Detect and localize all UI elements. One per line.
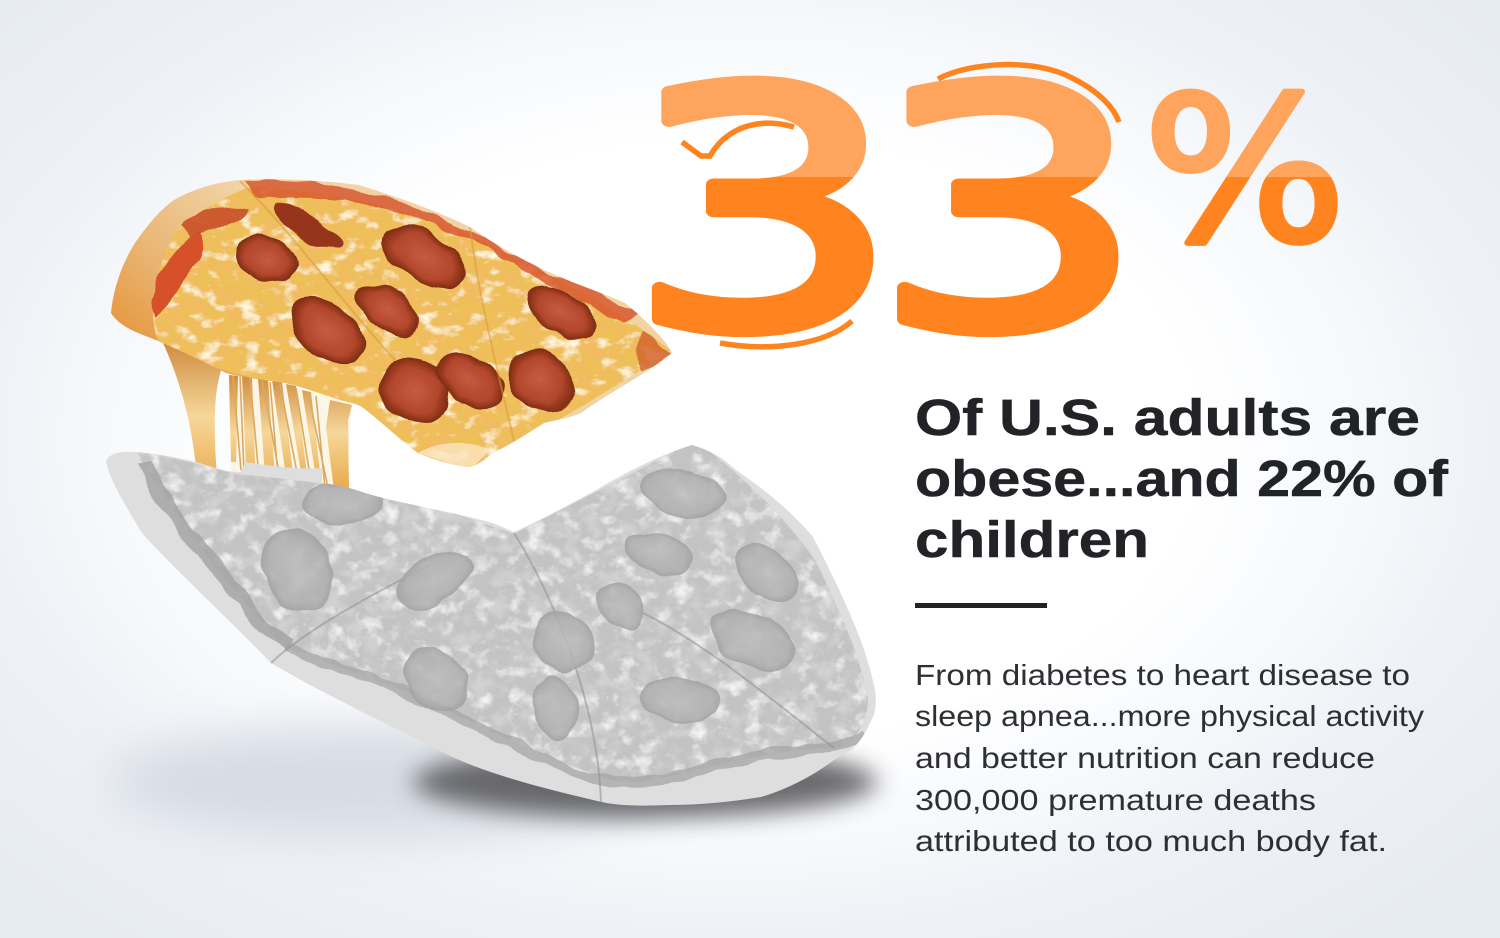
body text: [915, 660, 1425, 858]
body text: 300,000 premature deaths: [915, 785, 1316, 817]
heading: obese...and 22% of: [915, 450, 1449, 507]
slice cuts: [240, 181, 515, 445]
grey sauce and cheese surface: [138, 440, 868, 782]
body text: From diabetes to heart disease to: [915, 660, 1410, 692]
grey pepperoni: [249, 461, 810, 743]
pepperoni: [236, 202, 597, 423]
body text: sleep apnea...more physical activity: [915, 701, 1425, 733]
cheese surface: [153, 187, 670, 472]
heading: [915, 389, 1449, 568]
heading: children: [915, 511, 1149, 568]
body text: attributed to too much body fat.: [915, 826, 1387, 858]
pizza shadow: [110, 724, 877, 840]
pale cheese underside: [418, 442, 490, 467]
illustration: grey pizza: [106, 440, 876, 806]
illustration: pepperoni pizza slice: [111, 179, 672, 472]
body text: and better nutrition can reduce: [915, 743, 1375, 775]
divider: [915, 603, 1047, 608]
grey crust shading: [145, 460, 290, 646]
big statistic: 33%: [627, 20, 1346, 404]
number 33: 33: [627, 20, 1117, 404]
percent sign: %: [1143, 55, 1346, 288]
cheese strands: [163, 343, 352, 490]
accent swooshes: [682, 65, 1119, 347]
grey slice cuts: [271, 533, 834, 803]
tomato sauce patches: [150, 181, 672, 372]
heading: Of U.S. adults are: [915, 389, 1420, 446]
